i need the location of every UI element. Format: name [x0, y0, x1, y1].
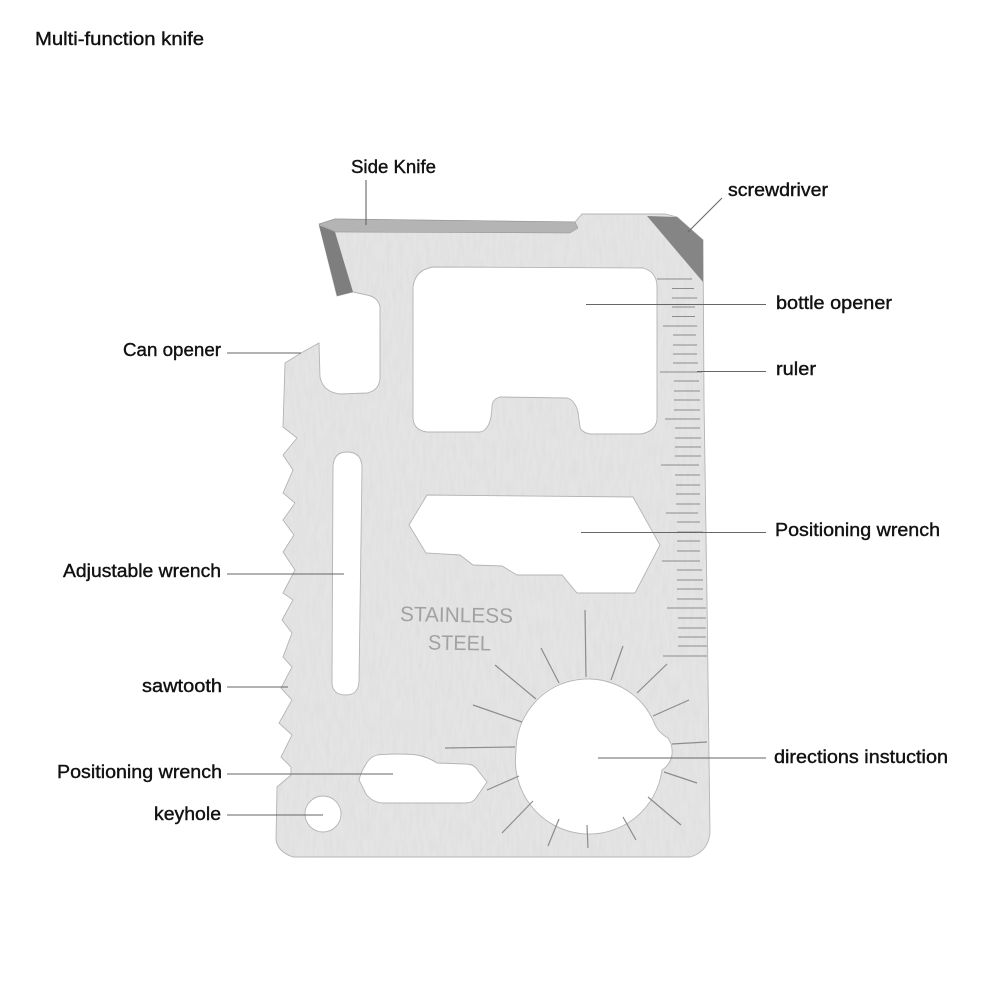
ruler ticks	[657, 279, 707, 656]
label: can opener: Can opener	[123, 339, 221, 360]
label: keyhole: keyhole	[154, 803, 221, 824]
label: sawtooth: sawtooth	[142, 675, 222, 696]
engraved text: stainless steel: STEEL	[428, 631, 491, 656]
label: screwdriver: screwdriver	[728, 179, 828, 200]
screwdriver bevel	[647, 216, 703, 282]
label: ruler	[697, 358, 816, 379]
label: directions instuction: directions instuction	[774, 746, 948, 767]
label: side knife	[351, 156, 436, 225]
label: side knife: Side Knife	[351, 156, 436, 177]
knife tip bevel	[319, 225, 353, 296]
card metal body	[270, 210, 715, 860]
label: adjustable wrench: Adjustable wrench	[63, 560, 221, 581]
multi-function card tool	[270, 210, 715, 860]
engraved text: stainless steel	[400, 603, 513, 656]
side knife edge	[319, 219, 578, 233]
card outline and cut-out edges	[276, 214, 710, 857]
label: ruler: ruler	[776, 358, 816, 379]
compass direction rays	[445, 610, 707, 848]
engraved text: stainless steel: STAINLESS	[400, 603, 513, 628]
label: positioning wrench left: Positioning wrench	[57, 761, 222, 782]
label: bottle opener: bottle opener	[776, 292, 892, 313]
label: screwdriver	[688, 179, 828, 232]
title: Multi-function knife	[35, 28, 204, 49]
label: positioning wrench right: Positioning wrench	[775, 519, 940, 540]
